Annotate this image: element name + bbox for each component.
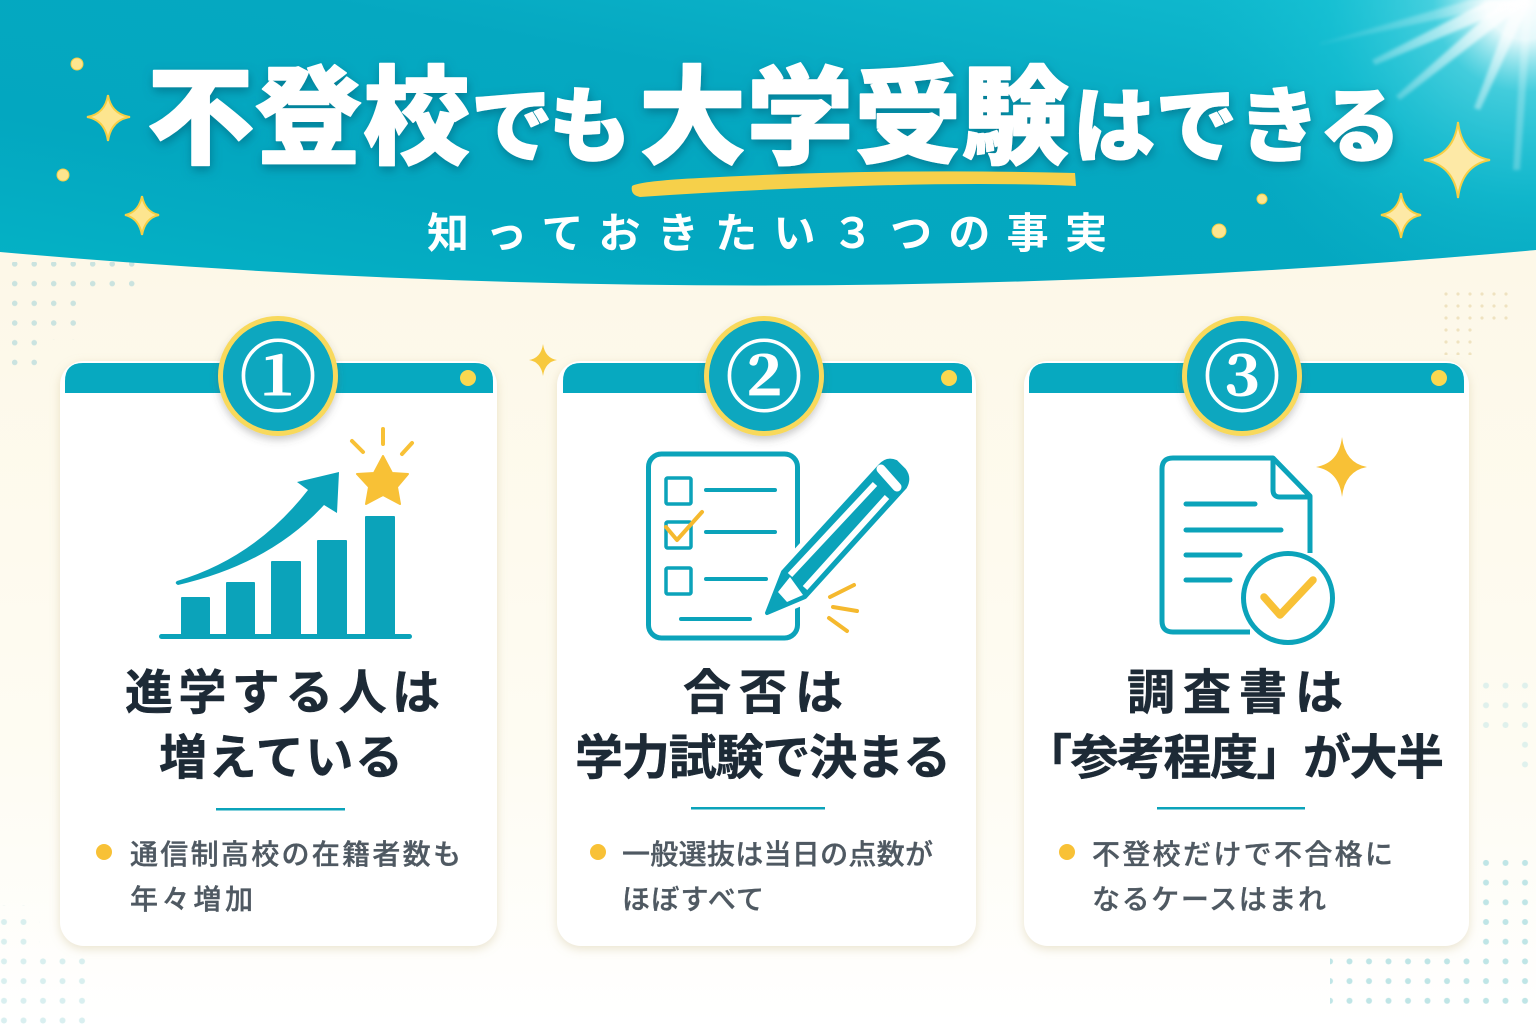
panel: card 3 <box>1024 317 1469 946</box>
dot <box>57 169 69 181</box>
card 1 number badge <box>220 317 336 434</box>
sparkle: right large <box>1424 122 1490 198</box>
card 3 header dot <box>1431 370 1447 386</box>
title: 不登校 <box>147 58 470 178</box>
card 3 number badge: ③ <box>1204 317 1280 428</box>
dot pattern: bottom left <box>0 905 90 1024</box>
dot <box>1212 224 1226 238</box>
panel: card 2 <box>557 317 976 946</box>
sparkle: right small <box>1381 193 1421 238</box>
card 3 number badge <box>1184 317 1300 434</box>
card 1 bullet <box>96 839 461 915</box>
card 2 heading: 学力試験で決まる <box>575 732 951 785</box>
dot <box>71 58 83 70</box>
card 3 bullet: なるケースはまれ <box>1092 884 1326 915</box>
card 2 header dot <box>941 370 957 386</box>
card 2 number badge <box>706 317 822 434</box>
card 2 number badge: ② <box>726 317 802 428</box>
card 1 divider <box>216 808 345 810</box>
card 2 bullet: 一般選抜は当日の点数が <box>622 839 933 870</box>
card 3 header bar <box>1029 363 1464 393</box>
card 1 header bar <box>65 363 493 393</box>
card 3 bullet: 不登校だけで不合格に <box>1092 839 1393 870</box>
title <box>147 58 1401 178</box>
card 1 bullet: 通信制高校の在籍者数も <box>130 839 461 870</box>
card 3 divider <box>1157 807 1305 810</box>
card 3 heading: 調査書は <box>1127 667 1343 720</box>
card 2 header bar <box>563 363 972 393</box>
card 1 body <box>60 361 497 946</box>
header banner <box>0 0 1536 300</box>
card 2 bullet <box>590 839 933 915</box>
icon: checklist and pencil <box>648 454 907 638</box>
card 2 body <box>557 361 976 946</box>
card 1 number badge: ① <box>240 317 316 428</box>
card 1 heading: 増えている <box>159 732 403 785</box>
card 1 header dot <box>460 370 476 386</box>
card 1 bullet: 年々増加 <box>130 884 253 915</box>
dot pattern: right middle <box>1480 680 1536 770</box>
card 3 body <box>1024 361 1469 946</box>
card 2 heading <box>575 667 951 785</box>
card 3 bullet <box>1059 839 1393 915</box>
sparkle: left large <box>87 95 130 141</box>
card 2 divider <box>691 807 825 810</box>
card 3 heading <box>1024 667 1444 785</box>
dot <box>1257 194 1267 204</box>
dot pattern: top right <box>1440 290 1515 355</box>
title: はできる <box>1073 82 1401 173</box>
card 3 heading: 「参考程度」が大半 <box>1024 732 1444 785</box>
card 2 bullet: ほぼすべて <box>622 884 764 915</box>
card 1 heading: 進学する人は <box>125 667 440 720</box>
sun glow <box>1320 0 1536 258</box>
title: でも <box>471 82 631 173</box>
card 1 heading <box>125 667 440 785</box>
title: 大学受験 <box>639 58 1069 178</box>
dot pattern: bottom right <box>1330 855 1536 1010</box>
icon: document with check <box>1162 437 1367 642</box>
sparkle: left small <box>125 196 159 235</box>
sparkles and dots <box>57 58 1490 238</box>
title underline brush <box>632 171 1076 197</box>
panel: card 1 <box>60 317 497 946</box>
subtitle: 知っておきたい３つの事実 <box>427 210 1107 257</box>
sparkle: between cards <box>529 344 557 376</box>
icon: rising bar chart with star <box>159 429 412 639</box>
card 2 heading: 合否は <box>683 667 843 720</box>
dot pattern: top left <box>8 262 145 372</box>
